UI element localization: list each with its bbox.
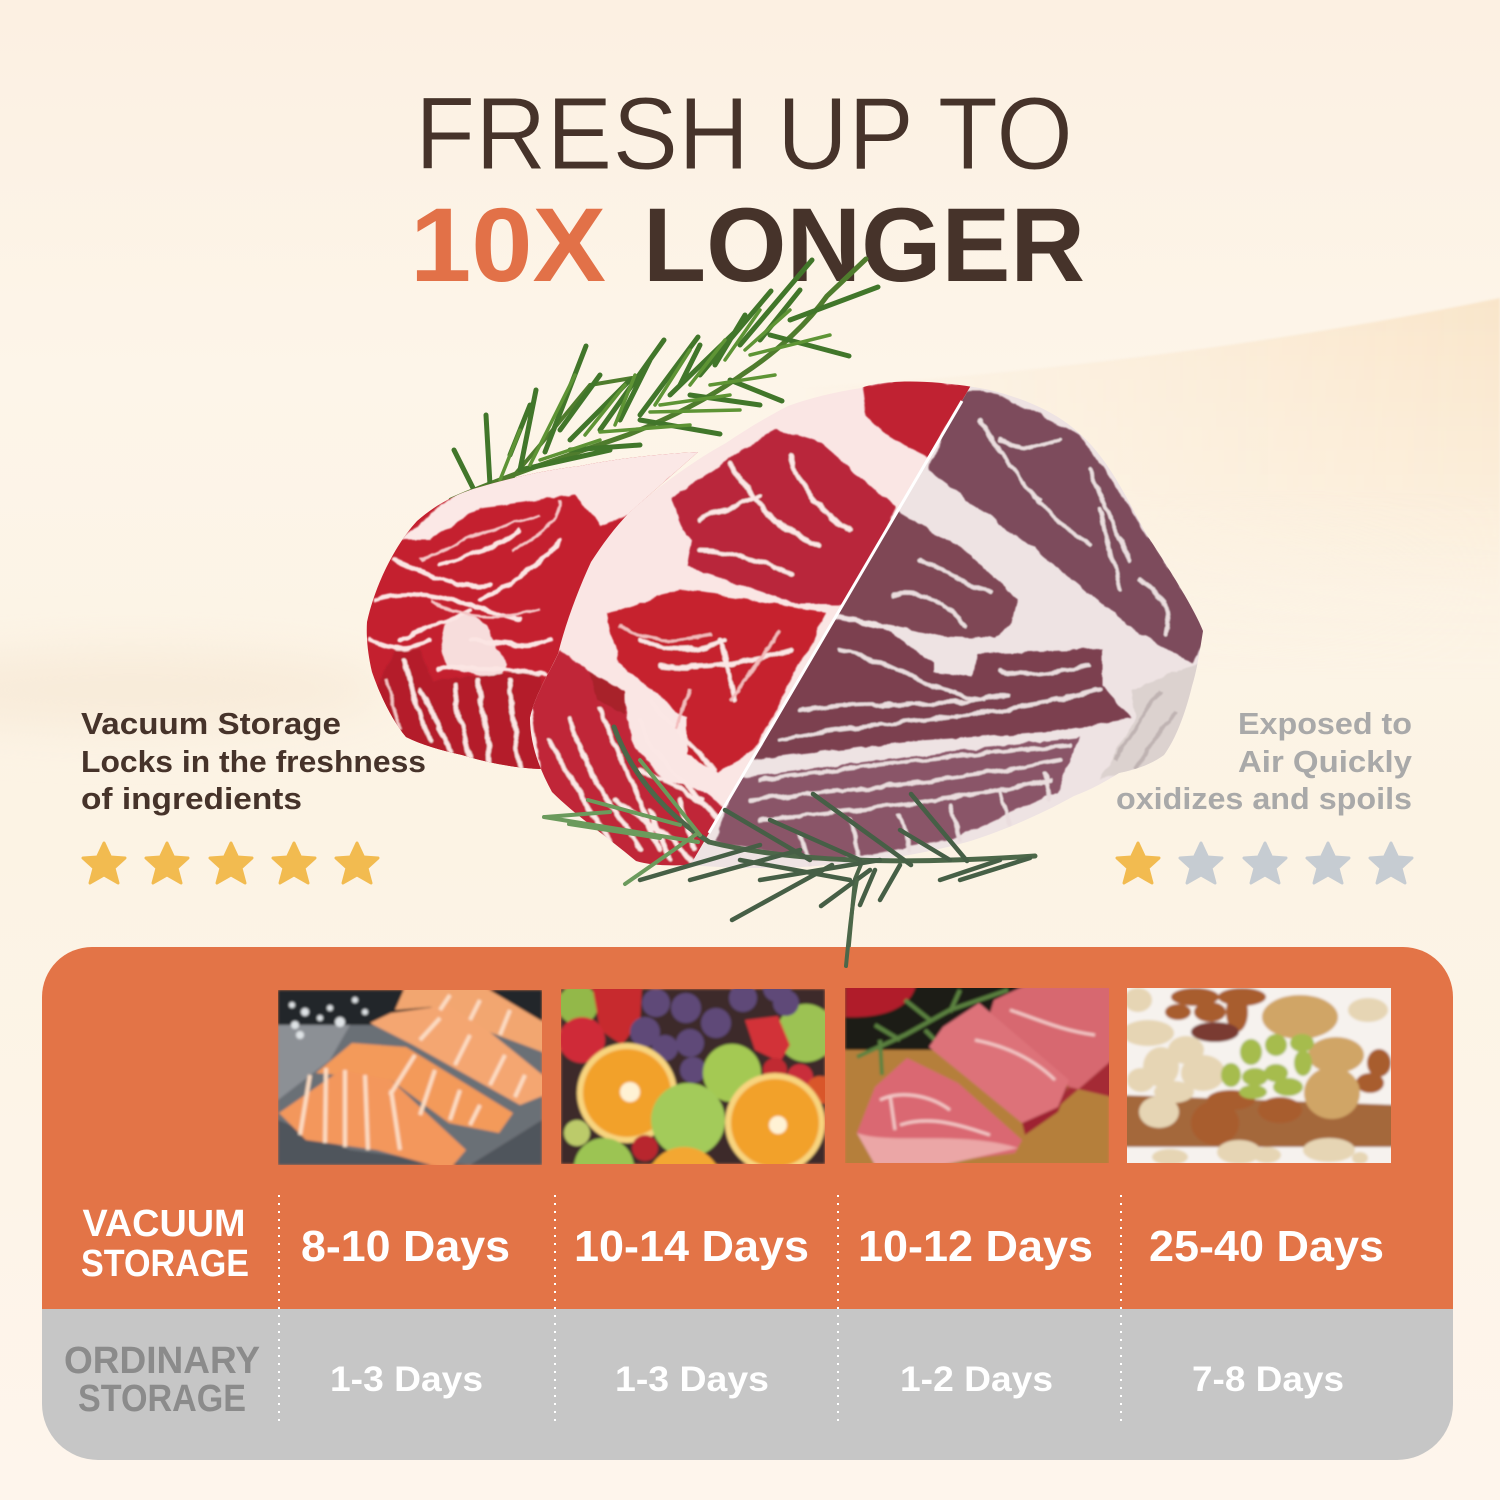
vacuum row background: [42, 947, 1453, 1309]
photo: salmon: [278, 985, 545, 1170]
callout text: [1116, 706, 1413, 816]
title line: fresh up to: FRESH UP TO: [415, 76, 1073, 191]
title line: 10X longer: LONGER: [643, 187, 1085, 304]
photo: beef: [845, 985, 1112, 1168]
fresh main muscle: [608, 590, 827, 773]
rosemary sprig: stem tip over table: [846, 880, 857, 966]
callout text: of ingredients: [81, 781, 302, 816]
oxidized half: [692, 386, 1203, 868]
callout: vacuum storage: [81, 706, 426, 883]
row label: ordinary storage: [64, 1340, 260, 1420]
title: [410, 76, 1085, 304]
fresh lower rim: [532, 649, 723, 866]
ordinary storage durations: 1-2 Days: [900, 1360, 1053, 1399]
background: [0, 298, 1500, 731]
vacuum storage durations: 25-40 Days: [1149, 1222, 1384, 1271]
vacuum storage durations: 10-12 Days: [858, 1222, 1093, 1271]
oxidized centre muscle: [833, 510, 1018, 638]
callout text: Air Quickly: [1238, 744, 1413, 779]
row label: ordinary storage: STORAGE: [78, 1378, 246, 1420]
steak: back: [366, 452, 698, 769]
callout text: oxidizes and spoils: [1116, 781, 1412, 816]
fresh corner muscle: [861, 378, 975, 457]
one star rating: [1117, 843, 1412, 883]
split line: [709, 401, 962, 833]
rosemary sprig: top: [451, 259, 878, 500]
vacuum storage durations: 10-14 Days: [574, 1222, 809, 1271]
oxidized top band muscle: [928, 392, 1210, 663]
fresh half: [530, 382, 970, 866]
vacuum storage durations: [301, 1222, 1384, 1271]
row label: vacuum storage: [81, 1203, 249, 1285]
salmon slices: [395, 985, 545, 1053]
ordinary storage durations: 1-3 Days: [330, 1360, 483, 1399]
fresh top muscle: [670, 429, 894, 604]
title line: 10X longer: [410, 187, 1085, 304]
callout text: Locks in the freshness: [81, 744, 426, 779]
callout: exposed to air: [1116, 706, 1413, 883]
ordinary storage durations: 7-8 Days: [1192, 1360, 1344, 1399]
callout text: [81, 706, 426, 816]
callout text: Exposed to: [1238, 706, 1412, 741]
ordinary row background: [42, 1309, 1453, 1460]
callout text: Vacuum Storage: [81, 706, 341, 741]
fat side: [1100, 664, 1198, 779]
oxidized main muscle: [754, 618, 1130, 760]
photo: nuts: [1127, 988, 1391, 1163]
row label: vacuum storage: VACUUM: [82, 1203, 246, 1245]
row label: vacuum storage: STORAGE: [81, 1243, 249, 1285]
oxidized lower rim: [715, 737, 1080, 861]
back steak top fat: [402, 452, 698, 542]
title line: 10X longer: 10X: [410, 187, 606, 304]
five star rating: [83, 843, 378, 883]
vacuum storage durations: 8-10 Days: [301, 1222, 510, 1271]
rosemary sprig: bottom: [544, 727, 1035, 966]
steak: front, half fresh half oxidized: [530, 382, 1203, 868]
ordinary storage durations: 1-3 Days: [615, 1360, 769, 1399]
row label: ordinary storage: ORDINARY: [64, 1340, 260, 1382]
ordinary storage durations: [330, 1360, 1344, 1399]
panel: storage comparison table: [42, 947, 1453, 1460]
photo: fruit: [561, 989, 825, 1164]
